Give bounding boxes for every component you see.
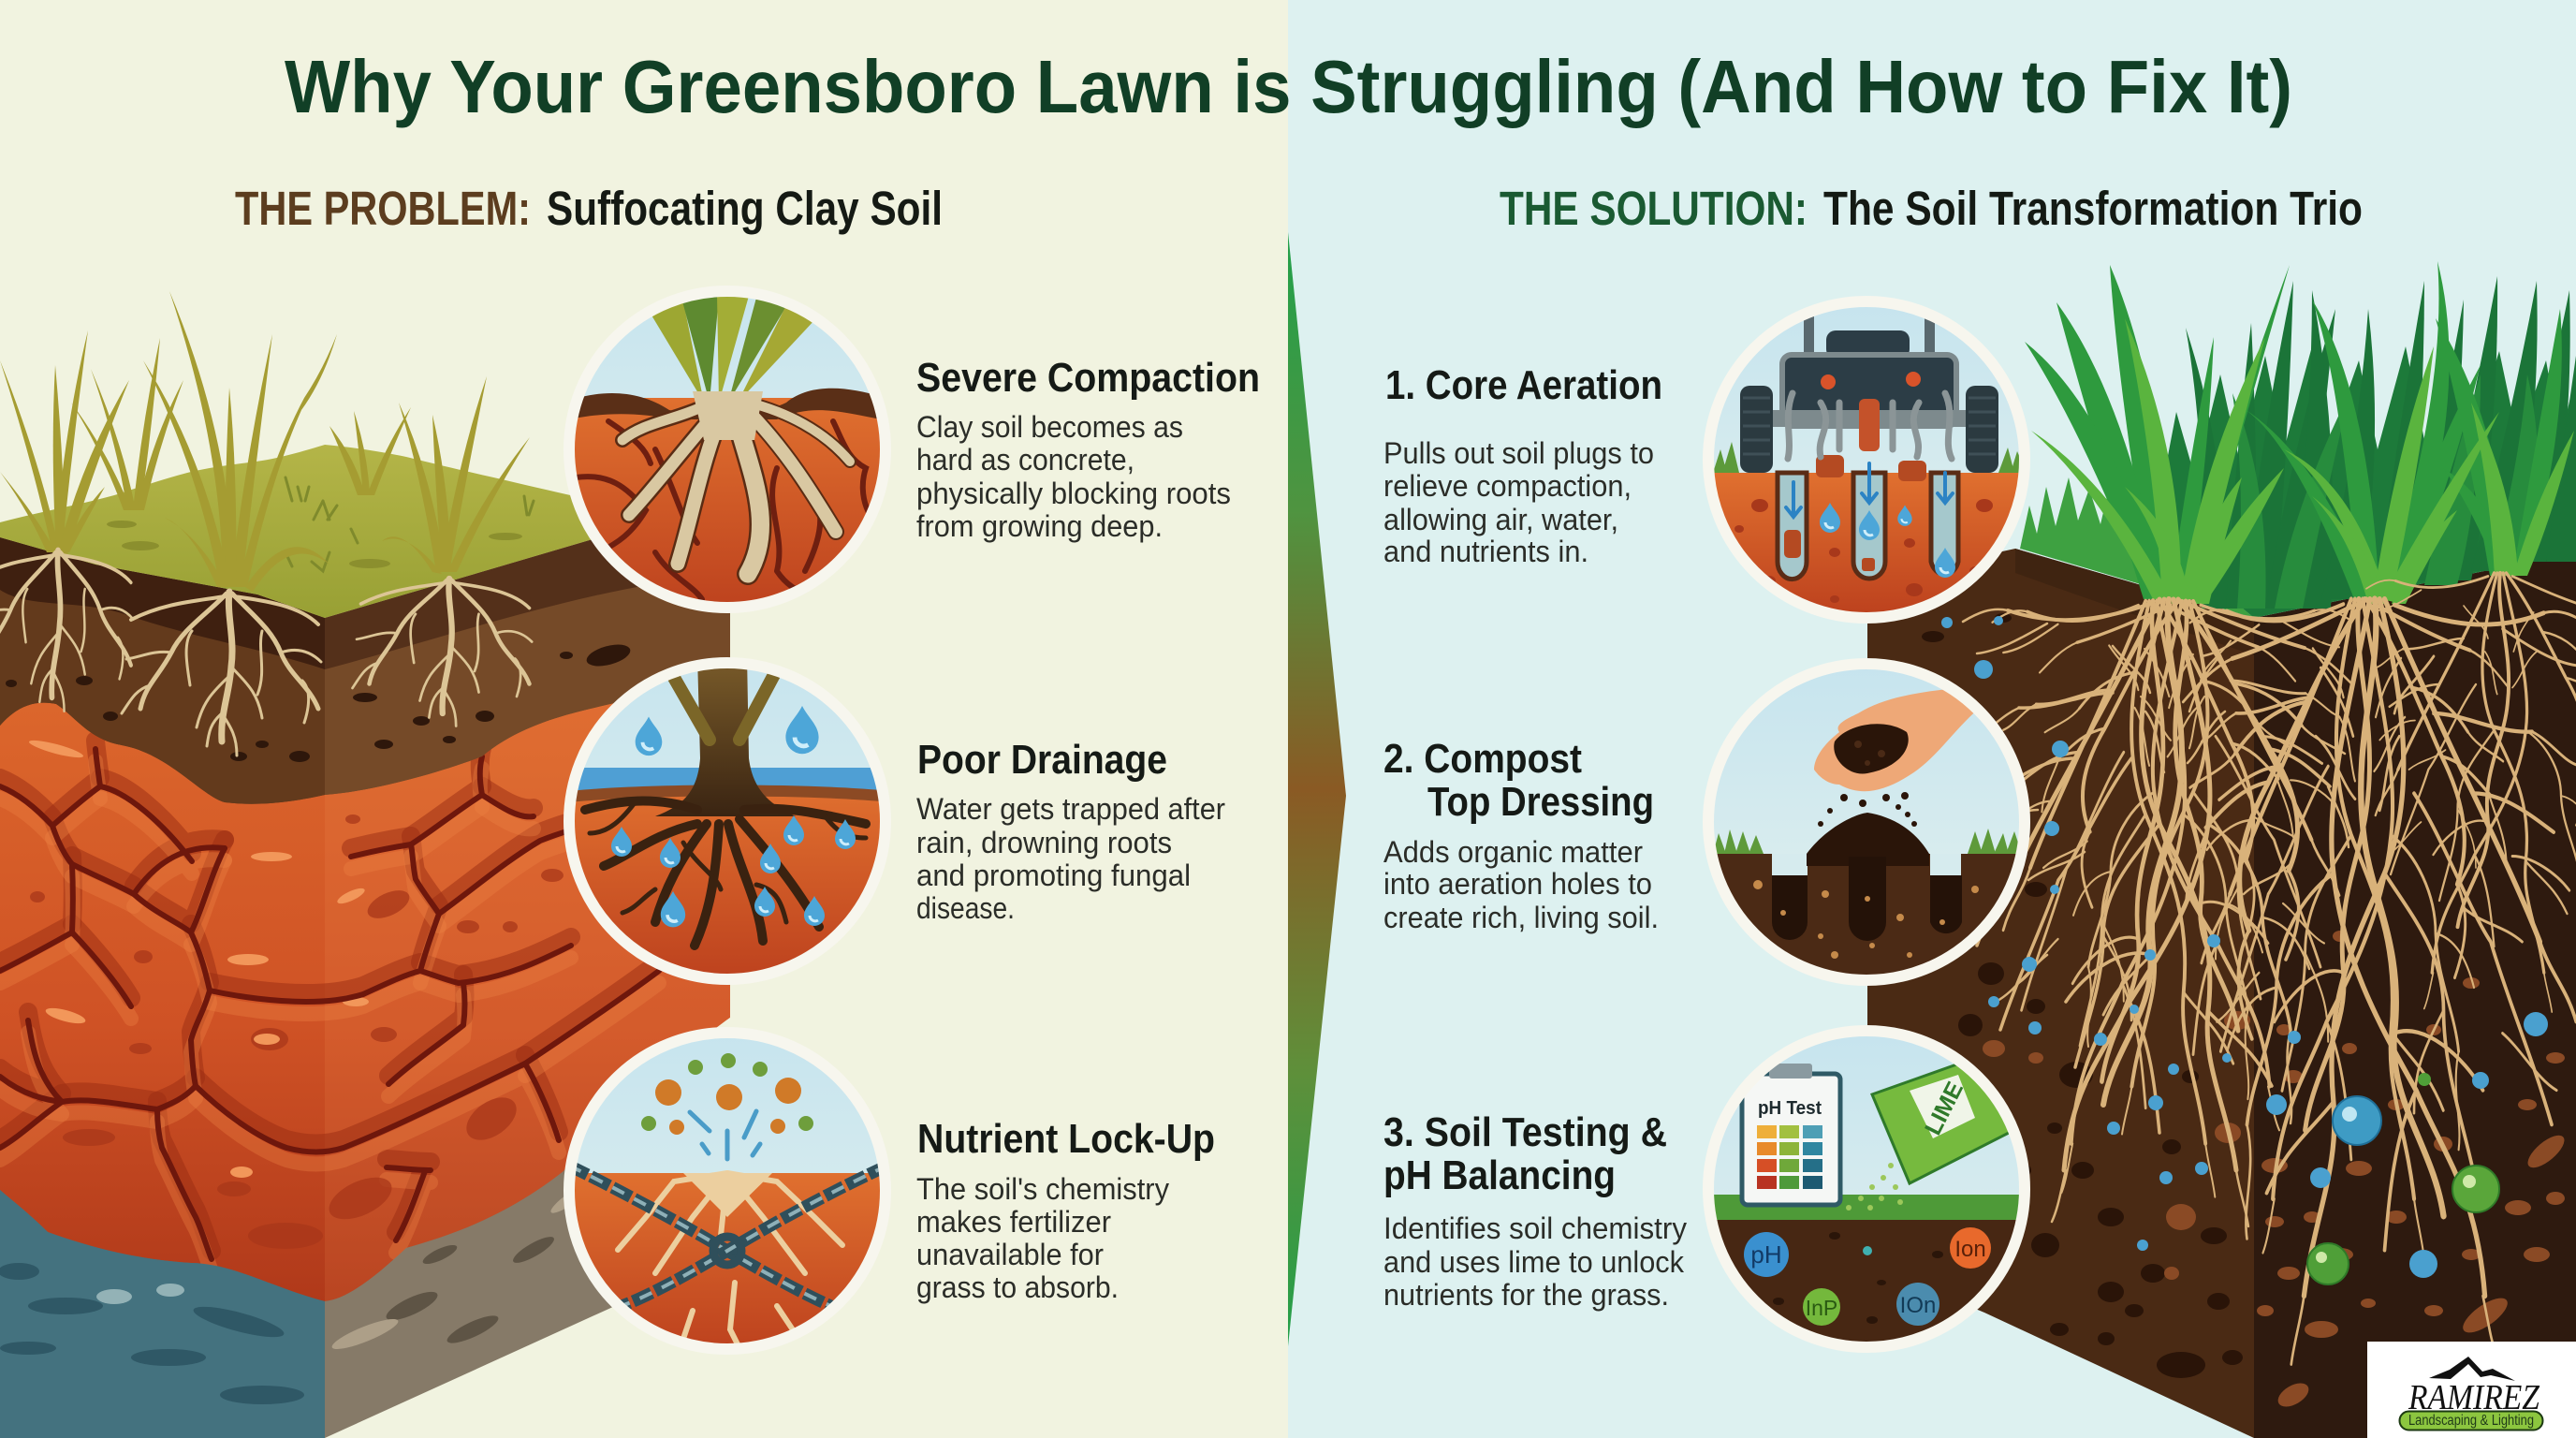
- text: poor drainage: [916, 737, 1225, 925]
- panel: severe compaction illustration: [562, 281, 899, 623]
- heading: the solution: The Soil Transformation Trio: [1823, 182, 2363, 235]
- text: severe compaction: physically blocking roots: [916, 477, 1231, 510]
- text: soil testing and pH balancing: and uses lime to unlock: [1383, 1245, 1685, 1279]
- text: severe compaction: from growing deep.: [916, 509, 1163, 543]
- ion balls: InP: [1806, 1296, 1837, 1320]
- heading: the problem: THE PROBLEM:: [235, 182, 531, 235]
- blades in circle: [651, 297, 812, 391]
- droplets in circle: [611, 706, 856, 927]
- text: poor drainage: and promoting fungal: [916, 858, 1191, 892]
- water and nutrient beads: [1941, 616, 2548, 1284]
- compost mound and holes: [1729, 813, 1979, 959]
- logo: Ramirez Landscaping & Lighting: [2367, 1342, 2576, 1438]
- text: nutrient lock-up: The soil's chemistry: [916, 1172, 1169, 1206]
- title: Why Your Greensboro Lawn is Struggling (And How to Fix It): [285, 45, 2292, 128]
- thick pale roots: [622, 391, 850, 574]
- soil holes: [1778, 473, 1958, 580]
- soil layer: brown topsoil: [0, 524, 730, 824]
- text: nutrient lock-up: makes fertilizer: [916, 1205, 1111, 1239]
- text: poor drainage: disease.: [916, 891, 1015, 925]
- front grass tufts: [2025, 261, 2574, 604]
- panel: nutrient lock-up illustration: [562, 1025, 899, 1362]
- text: soil testing and pH balancing: nutrients for the grass.: [1383, 1278, 1669, 1312]
- back grass blades: [2020, 276, 2576, 618]
- clay cracks: [0, 749, 659, 1259]
- aerator machine: [1740, 295, 1998, 473]
- text: nutrient lock-up: Nutrient Lock-Up: [917, 1116, 1215, 1162]
- text: nutrient lock-up: unavailable for: [916, 1238, 1104, 1271]
- text: soil testing and pH balancing: [1383, 1109, 1687, 1312]
- soil layer: cracked orange clay: [0, 687, 730, 1301]
- text: compost top dressing: Adds organic matter: [1383, 835, 1643, 869]
- grass surface: dry olive lawn: [0, 445, 599, 618]
- grass tuft: dry blades: [0, 291, 530, 592]
- text: compost top dressing: Top Dressing: [1427, 779, 1654, 825]
- panel: core aeration illustration: [1708, 295, 2027, 623]
- healthy deep roots: [1963, 573, 2576, 1364]
- logo: Ramirez Landscaping & Lighting: Landscaping & Lighting: [2408, 1413, 2534, 1429]
- illustration: healthy soil cross-section: [1867, 261, 2576, 1438]
- clipboard: [1742, 1064, 1840, 1205]
- pale roots: [618, 1173, 842, 1348]
- ion balls: IOn: [1900, 1293, 1936, 1318]
- text: soil testing and pH balancing: 3. Soil Testing &: [1383, 1109, 1667, 1155]
- nutrient dots: [641, 1053, 813, 1159]
- text: soil testing and pH balancing: pH Balancing: [1383, 1152, 1616, 1198]
- arrow: problem to solution divider: [1288, 232, 1346, 1346]
- text: compost top dressing: [1383, 736, 1659, 934]
- clipboard: pH Test: [1758, 1098, 1822, 1119]
- text: core aeration: 1. Core Aeration: [1385, 362, 1662, 408]
- chains: [569, 1166, 887, 1313]
- text: soil testing and pH balancing: Identifies soil chemistry: [1383, 1211, 1687, 1245]
- text: severe compaction: Severe Compaction: [916, 355, 1260, 401]
- text: core aeration: [1383, 362, 1662, 568]
- heading: the problem: [235, 182, 943, 235]
- hand with compost: [1814, 685, 1984, 791]
- text: core aeration: relieve compaction,: [1383, 469, 1632, 503]
- text: compost top dressing: 2. Compost: [1383, 736, 1582, 782]
- lime bag: LIME: [1920, 1078, 1969, 1139]
- lime bag: [1872, 1057, 2012, 1183]
- ion balls: pH: [1750, 1240, 1782, 1269]
- soil block faces: [1867, 549, 2576, 1438]
- text: severe compaction: Clay soil becomes as: [916, 410, 1183, 444]
- text: severe compaction: hard as concrete,: [916, 443, 1134, 477]
- text: poor drainage: rain, drowning roots: [916, 826, 1172, 859]
- heading: the solution: [1500, 182, 2363, 235]
- text: core aeration: allowing air, water,: [1383, 503, 1618, 536]
- soil layer: bedrock: [0, 1147, 646, 1438]
- background: problem side: [0, 0, 1288, 1438]
- text: severe compaction: [916, 355, 1260, 543]
- text: core aeration: and nutrients in.: [1383, 535, 1588, 568]
- soil particles: [1922, 613, 2569, 1412]
- text: poor drainage: Poor Drainage: [917, 737, 1167, 783]
- heading: the problem: Suffocating Clay Soil: [547, 182, 943, 235]
- text: nutrient lock-up: [916, 1116, 1215, 1304]
- ion balls: [1744, 1227, 1991, 1326]
- heading: the solution: THE SOLUTION:: [1500, 182, 1808, 235]
- text: core aeration: Pulls out soil plugs to: [1383, 436, 1654, 470]
- illustration: compacted clay soil cross-section: [0, 291, 730, 1438]
- text: poor drainage: Water gets trapped after: [916, 792, 1225, 826]
- text: nutrient lock-up: grass to absorb.: [916, 1270, 1119, 1304]
- dark trunk and roots: [585, 655, 866, 946]
- panel: soil testing and pH balancing illustration: [1708, 1030, 2027, 1351]
- panel: poor drainage illustration: [562, 655, 899, 992]
- panel: compost top dressing illustration: [1708, 660, 2027, 985]
- background: solution side: [1288, 0, 2576, 1438]
- logo: Ramirez Landscaping & Lighting: RAMIREZ: [2408, 1378, 2540, 1417]
- falling compost: [1779, 792, 1950, 883]
- text: compost top dressing: create rich, living soil.: [1383, 901, 1659, 934]
- text: compost top dressing: into aeration holes to: [1383, 867, 1652, 901]
- ion balls: Ion: [1954, 1237, 1986, 1262]
- roots: shallow roots in topsoil: [0, 550, 532, 756]
